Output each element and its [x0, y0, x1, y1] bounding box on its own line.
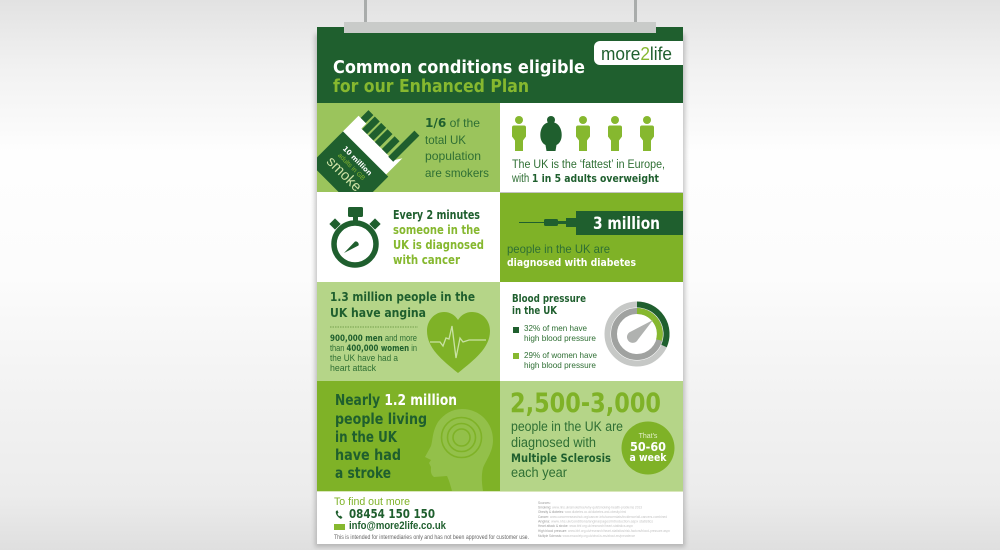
diabetes text	[507, 242, 636, 269]
icon: people row	[512, 116, 654, 151]
MS text: diagnosed with	[511, 435, 596, 450]
callout: 50-60 a week: 50-60	[630, 439, 666, 454]
legend: men: 32% of men have	[524, 323, 587, 333]
legend: women	[513, 350, 597, 370]
icon: heart with pulse	[427, 312, 490, 373]
header panel	[317, 27, 683, 103]
angina detail text: the UK have had a	[330, 353, 398, 363]
poster	[310, 22, 683, 544]
obesity text	[511, 159, 665, 185]
legend: women: 29% of women have	[524, 350, 597, 360]
stroke text: people living	[335, 410, 427, 428]
callout: 50-60 a week: That's	[639, 433, 658, 440]
chart: blood pressure gauge	[608, 304, 667, 364]
smokers text: are smokers	[425, 166, 489, 180]
panel: blood pressure	[500, 282, 683, 381]
angina detail text: 900,000 men and more	[330, 333, 417, 344]
sources: High blood pressure: www.bhf.org.uk/research/heart-statistics/risk-factors/blood-pressure.aspx	[538, 529, 670, 533]
MS text	[511, 419, 623, 480]
title: Common conditions eligible	[333, 57, 585, 78]
cancer text	[393, 207, 484, 267]
angina detail text: than 400,000 women in	[330, 343, 417, 354]
email: info@more2life.co.uk	[349, 520, 447, 532]
panel: angina	[317, 282, 500, 381]
stroke text: a stroke	[335, 464, 391, 482]
panel: multiple sclerosis	[500, 381, 683, 491]
legend: men: high blood pressure	[524, 333, 596, 343]
cancer text: UK is diagnosed	[393, 237, 484, 252]
sources: Angina: www.nhs.uk/conditions/angina/pages/introduction.aspx statistics	[538, 520, 653, 524]
title	[333, 57, 585, 97]
callout: 50-60 a week	[622, 422, 674, 474]
blood pressure heading: in the UK	[512, 304, 557, 317]
legend: women: high blood pressure	[524, 360, 596, 370]
stat: 2,500-3,000: 2,500-3,000	[510, 388, 661, 419]
cancer text: Every 2 minutes	[393, 207, 480, 222]
smokers text: population	[425, 149, 481, 163]
footer	[317, 491, 683, 544]
MS text: people in the UK are	[511, 419, 623, 434]
sources: Multiple Sclerosis: www.mssociety.org.uk/what-is-ms/about-ms/prevalence	[538, 534, 635, 538]
sources: Obesity & diabetes: www.diabetes.co.uk/diabetes-and-obesity.html	[538, 510, 626, 514]
smokers text	[425, 116, 489, 180]
panel: obesity	[500, 103, 683, 192]
angina detail text	[330, 333, 417, 373]
panel: diabetes	[500, 193, 683, 282]
disclaimer: This is intended for intermediaries only and has not been approved for customer use.	[334, 534, 529, 541]
poster shadow	[315, 34, 685, 547]
pack label: adults in GB	[336, 152, 366, 182]
cancer text: with cancer	[393, 252, 461, 267]
pack label	[326, 146, 372, 191]
MS text: Multiple Sclerosis	[511, 451, 611, 465]
logo	[594, 41, 683, 65]
MS text: each year	[511, 465, 567, 480]
pack label: smoke	[323, 154, 364, 195]
blood pressure heading: Blood pressure	[512, 292, 586, 305]
icon: email	[334, 524, 345, 530]
sources: Cancer: www.cancerresearchuk.org/cancer-info/cancerstats/incidence/all-cancers-combined	[538, 515, 667, 519]
obesity text: with 1 in 5 adults overweight	[511, 172, 659, 185]
blood pressure heading	[512, 292, 586, 317]
sources: Heart attack & stroke: www.bhf.org.uk/research/heart-statistics.aspx	[538, 524, 633, 528]
smokers text: 1/6 of the	[425, 116, 480, 130]
logo: more2life	[601, 44, 672, 64]
phone number: 08454 150 150	[349, 507, 435, 521]
panel: smokers	[317, 103, 500, 192]
icon: stopwatch	[329, 207, 381, 265]
angina detail text: heart attack	[330, 363, 376, 373]
angina heading: UK have angina	[330, 305, 426, 320]
legend: men	[513, 323, 596, 343]
contact heading: To find out more	[334, 496, 410, 508]
panel: cancer	[317, 192, 500, 282]
stroke text: Nearly 1.2 million	[335, 391, 457, 409]
cancer text: someone in the	[393, 222, 480, 237]
icon: cigarette pack	[317, 110, 420, 192]
icon: syringe	[519, 211, 683, 235]
panel: stroke	[317, 381, 500, 491]
sources	[538, 501, 670, 538]
stroke text: have had	[335, 446, 401, 464]
diabetes text: diagnosed with diabetes	[507, 256, 636, 269]
hanging bar	[344, 22, 656, 33]
title: for our Enhanced Plan	[333, 76, 529, 97]
pack label: 10 million	[341, 145, 373, 177]
sources: Smoking: www.nhs.uk/smokefree/why-quit/smoking-health-problems 2013	[538, 506, 642, 510]
sources: Sources:	[538, 501, 551, 505]
icon: phone	[336, 510, 342, 519]
hanging rods	[364, 0, 637, 23]
icon: head with rings	[425, 409, 493, 491]
stat: 3 million: 3 million	[593, 214, 660, 234]
stroke text	[335, 391, 457, 482]
gauge needle	[627, 320, 653, 343]
diabetes text: people in the UK are	[507, 242, 610, 256]
stroke text: in the UK	[335, 428, 398, 446]
angina heading: 1.3 million people in the	[330, 289, 475, 304]
angina heading	[330, 289, 475, 320]
obesity text: The UK is the ‘fattest’ in Europe,	[512, 159, 665, 171]
smokers text: total UK	[425, 133, 466, 147]
callout: 50-60 a week: a week	[630, 451, 667, 464]
